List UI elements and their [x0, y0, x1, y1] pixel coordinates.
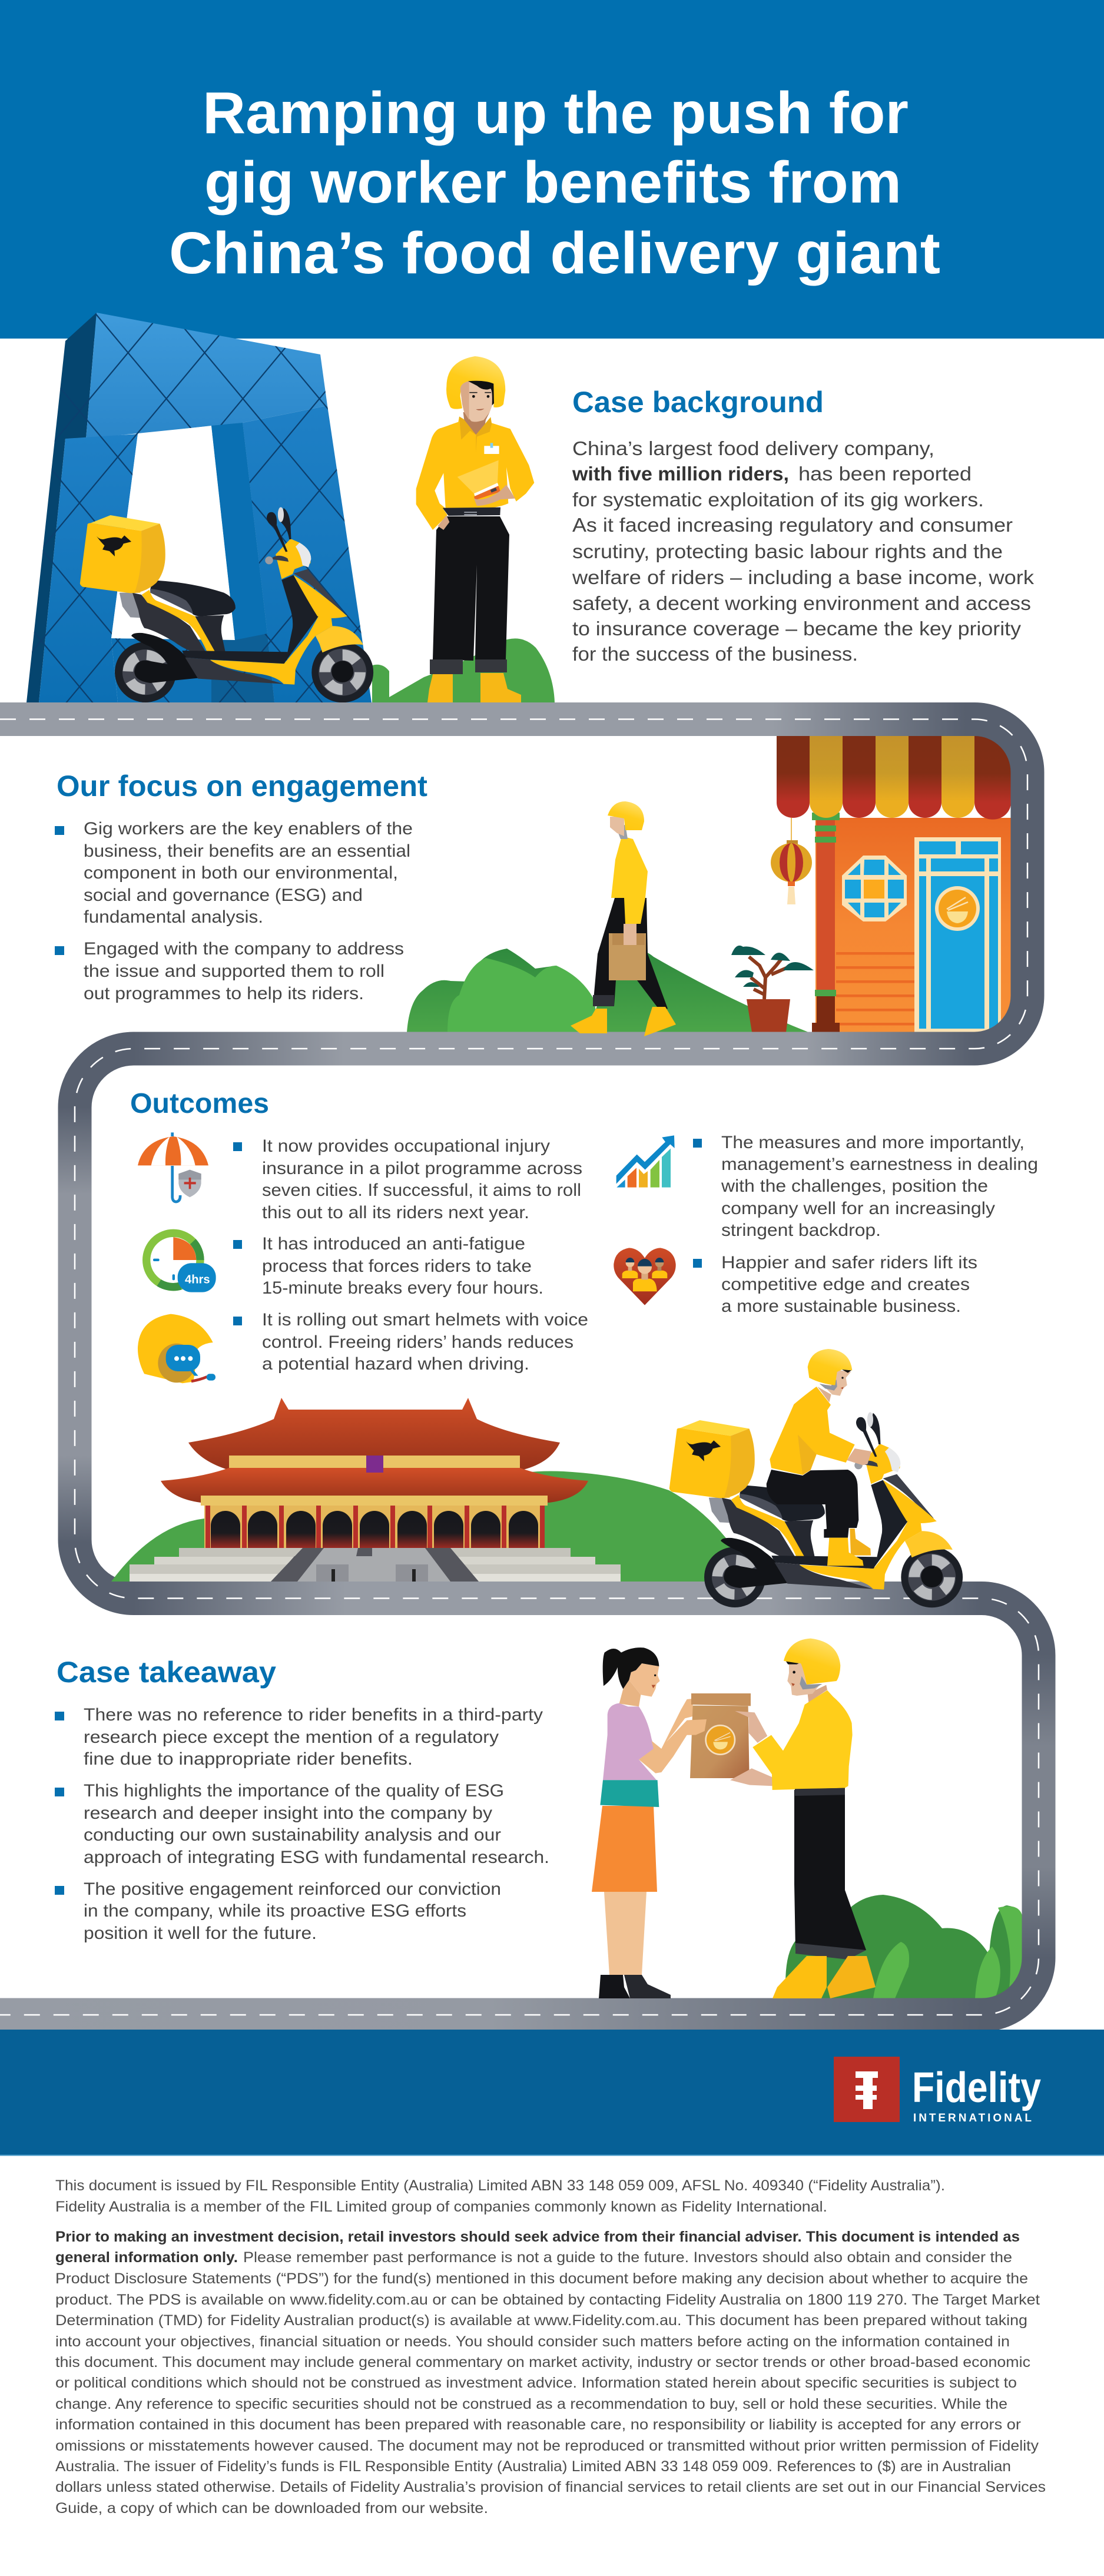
icon: growth chart [616, 1135, 675, 1188]
text: takeaway bullet three: position it well for the future. [84, 1924, 317, 1943]
title: gig worker benefits from [204, 150, 901, 216]
illustration: bonsai in pot [731, 946, 814, 1032]
icon: octagonal window [842, 856, 907, 921]
text: outcome two: 15-minute breaks every four hours. [262, 1278, 543, 1298]
header banner [0, 0, 1104, 339]
illustration: delivery rider handing over food [730, 1639, 876, 1998]
text: takeaway bullet one: There was no reference to rider benefits in a third-party [84, 1705, 543, 1725]
heading: our focus on engagement: Our focus on engagement [57, 770, 427, 803]
text: outcome four: company well for an increasingly [721, 1199, 995, 1218]
text: engagement bullet one: fundamental analysis. [84, 907, 263, 927]
text: engagement bullet one: component in both our environmental, [84, 863, 398, 883]
text: engagement bullet two [55, 939, 404, 1003]
logo: Fidelity International [834, 2057, 1041, 2124]
illustration: takeaway bush [785, 1895, 1023, 1998]
text: case background body: welfare of riders – including a base income, work [572, 566, 1035, 588]
text: legal disclaimer: information contained in this document has been prepared with reasonable care, no responsibility or liability is accepted for any errors or [55, 2416, 1021, 2433]
text: legal disclaimer: omissions or misstatements however caused. The document may not be reproduced or transmitted without prior written permission of Fidelity [55, 2438, 1039, 2454]
text: legal disclaimer: general information only. [55, 2249, 238, 2266]
text: outcome one [233, 1136, 582, 1222]
heading: case background: Case background [572, 386, 824, 419]
text: case background body: has been reported [798, 463, 972, 485]
logo: Fidelity International: Fidelity [912, 2064, 1041, 2111]
text: issuer notice: This document is issued by FIL Responsible Entity (Australia) Limited ABN 33 148 059 009, AFSL No. 409340 (“Fidelity Australia”). [55, 2177, 945, 2194]
text: case background body: safety, a decent working environment and access [572, 592, 1031, 614]
title [169, 80, 940, 286]
text: engagement bullet one: business, their benefits are an essential [84, 841, 410, 861]
text: case background body: for the success of the business. [572, 643, 858, 665]
icon: heart with three riders [614, 1248, 676, 1305]
text: outcome four: The measures and more importantly, [721, 1133, 1025, 1152]
text: case background body: China’s largest food delivery company, [572, 437, 934, 459]
text: legal disclaimer: Australia. The issuer of Fidelity’s funds is FIL Responsible Entity (Australia) Limited ABN 33 148 059 009. References to ($) are in Australian [55, 2458, 1011, 2475]
text: legal disclaimer: dollars unless stated otherwise. Details of Fidelity Australia’s provision of financial services to retail clients are set out in our Financial Services [55, 2479, 1046, 2495]
text: case background body [572, 437, 1035, 665]
text: outcome four [693, 1133, 1038, 1240]
icon: clock with 4hrs badge [147, 1233, 216, 1292]
text: outcome five [693, 1253, 977, 1316]
text: outcome one: insurance in a pilot programme across [262, 1159, 582, 1178]
text: takeaway bullet three: The positive engagement reinforced our conviction [84, 1879, 501, 1899]
icon: hanging lantern [771, 818, 812, 904]
text: issuer notice: Fidelity Australia is a member of the FIL Limited group of companies commonly known as Fidelity International. [55, 2199, 827, 2215]
text: outcome four: with the challenges, position the [721, 1176, 988, 1196]
illustration: rider on delivery scooter [669, 1349, 963, 1607]
text: takeaway bullet one: research piece except the mention of a regulatory [84, 1728, 499, 1747]
text: case background body: to insurance coverage – became the key priority [572, 618, 1022, 639]
text: outcome four: stringent backdrop. [721, 1221, 881, 1240]
text: legal disclaimer: Guide, a copy of which can be downloaded from our website. [55, 2500, 488, 2517]
text: legal disclaimer: this document. This document may include general commentary on market activity, industry or sector trends or other broad-based economic [55, 2354, 1030, 2371]
text: outcome four: management’s earnestness in dealing [721, 1155, 1038, 1174]
text: takeaway bullet one: fine due to inappropriate rider benefits. [84, 1749, 413, 1769]
illustration: CCTV building [26, 313, 372, 702]
text: outcome three [233, 1310, 588, 1374]
text: outcome three: a potential hazard when driving. [262, 1354, 529, 1374]
text: outcome five: competitive edge and creates [721, 1275, 970, 1294]
footer banner [0, 2030, 1104, 2155]
text: legal disclaimer: Determination (TMD) for Fidelity Australian product(s) is available at www.Fidelity.com.au. This document has been prepared without taking [55, 2312, 1027, 2329]
text: engagement bullet two: out programmes to help its riders. [84, 984, 364, 1003]
text: takeaway bullet two [55, 1781, 549, 1867]
logo: Fidelity International: INTERNATIONAL [913, 2112, 1032, 2124]
heading: outcomes: Outcomes [130, 1088, 269, 1119]
text: outcome two: process that forces riders to take [262, 1256, 532, 1276]
illustration: green hill behind rider [372, 638, 555, 702]
text: legal disclaimer: Product Disclosure Statements (“PDS”) for the fund(s) mentioned in this document before making any decision about whether to acquire the [55, 2270, 1028, 2287]
text: takeaway bullet three: in the company, while its proactive ESG efforts [84, 1901, 466, 1921]
text: legal disclaimer: or political conditions which should not be construed as investment advice. Information stated herein about specific securities is subject to [55, 2375, 1017, 2391]
text: engagement bullet one: Gig workers are the key enablers of the [84, 819, 413, 838]
text: engagement bullet two: the issue and supported them to roll [84, 962, 384, 981]
illustration: imperial palace [130, 1398, 621, 1582]
illustration: bush and hill by shop [407, 949, 808, 1032]
text: takeaway bullet two: conducting our own sustainability analysis and our [84, 1825, 501, 1845]
road winding through the page [0, 720, 1039, 2015]
text: outcome one: seven cities. If successful, it aims to roll [262, 1181, 581, 1200]
text: engagement bullet one: social and governance (ESG) and [84, 886, 363, 905]
text: outcome three: It is rolling out smart helmets with voice [262, 1310, 588, 1330]
text: outcome two [233, 1234, 543, 1298]
illustration: restaurant shopfront [777, 736, 1011, 1032]
text: legal disclaimer: Please remember past performance is not a guide to the future. Investors should also obtain and consider the [243, 2249, 1012, 2266]
illustration: walking delivery rider [571, 801, 676, 1036]
icon: smart helmet [138, 1314, 216, 1383]
illustration: green hill behind palace [111, 1471, 757, 1582]
text: takeaway bullet two: This highlights the importance of the quality of ESG [84, 1781, 504, 1801]
text: outcome one: this out to all its riders next year. [262, 1203, 529, 1222]
text: takeaway bullet two: research and deeper insight into the company by [84, 1803, 492, 1823]
text: case background body: scrutiny, protecting basic labour rights and the [572, 541, 1003, 562]
text: takeaway bullet one [55, 1705, 543, 1769]
text: case background body: As it faced increasing regulatory and consumer [572, 514, 1013, 536]
text: engagement bullet two: Engaged with the company to address [84, 939, 404, 959]
text: outcome one: It now provides occupational injury [262, 1136, 550, 1156]
text: takeaway bullet two: approach of integrating ESG with fundamental research. [84, 1848, 549, 1867]
text: outcome five: a more sustainable business. [721, 1297, 961, 1316]
icon: umbrella and shield [138, 1132, 208, 1202]
awning [777, 736, 1011, 820]
illustration: parked scooter [80, 507, 373, 702]
text: legal disclaimer: change. Any reference to specific securities should not be construed as a recommendation to buy, sell or hold these securities. While the [55, 2396, 1007, 2412]
heading: case takeaway: Case takeaway [57, 1656, 276, 1689]
text: outcome five: Happier and safer riders lift its [721, 1253, 977, 1272]
text: legal disclaimer: into account your objectives, financial situation or needs. You should consider such matters before acting on the information contained in [55, 2333, 1010, 2350]
text: engagement bullet one [55, 819, 413, 927]
text: legal disclaimer [55, 2229, 1046, 2517]
illustration: customer receiving food [592, 1647, 751, 1998]
text: legal disclaimer: product. The PDS is available on www.fidelity.com.au or can be obtained by contacting Fidelity Australia on 1800 119 270. The Target Market [55, 2292, 1040, 2308]
text: issuer notice [55, 2177, 945, 2215]
text: legal disclaimer: Prior to making an investment decision, retail investors should seek advice from their financial adviser. This document is intended as [55, 2229, 1020, 2245]
text: case background body: with five million riders, [572, 463, 789, 485]
illustration: standing delivery rider [416, 356, 534, 702]
text: outcome two: It has introduced an anti-fatigue [262, 1234, 525, 1254]
icon: bowl sign on door [935, 886, 980, 931]
text: takeaway bullet three [55, 1879, 501, 1943]
text: case background body: for systematic exploitation of its gig workers. [572, 489, 984, 510]
title: China’s food delivery giant [169, 220, 940, 286]
text: outcome three: control. Freeing riders’ hands reduces [262, 1332, 573, 1352]
icon: clock with 4hrs badge: 4hrs [185, 1272, 210, 1286]
title: Ramping up the push for [203, 80, 909, 146]
